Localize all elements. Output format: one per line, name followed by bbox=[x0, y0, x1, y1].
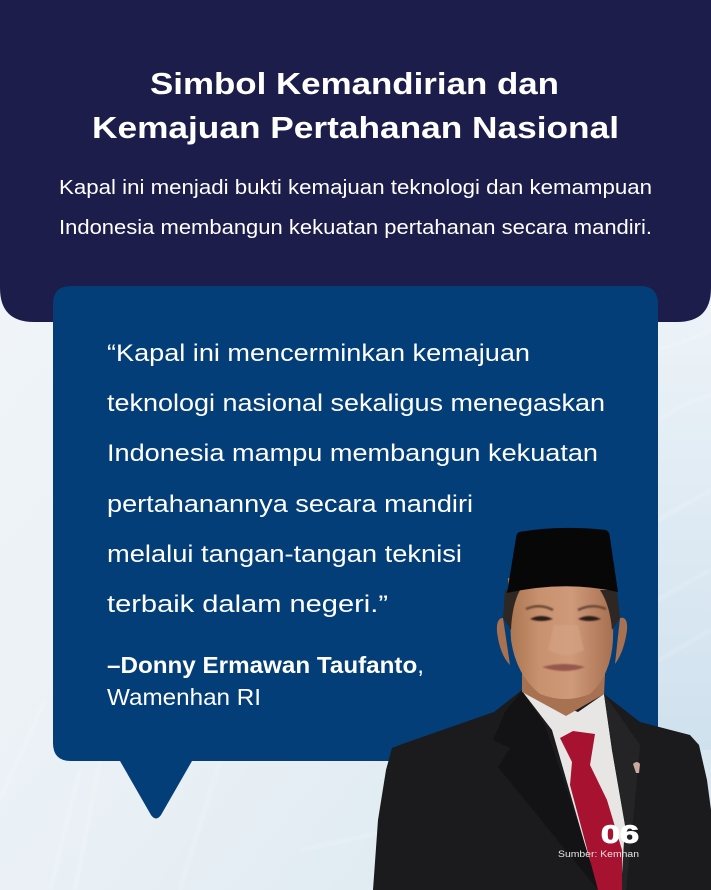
right lapel bbox=[604, 694, 640, 890]
subtitle: Kapal ini menjadi bukti kemajuan teknologi dan kemampuan bbox=[59, 176, 652, 199]
header panel bbox=[0, 0, 711, 322]
subtitle bbox=[59, 176, 652, 239]
title bbox=[92, 66, 619, 145]
facial features bbox=[526, 606, 606, 671]
quote text: melalui tangan-tangan teknisi bbox=[107, 541, 462, 568]
page number: 06 bbox=[601, 821, 639, 849]
quote text bbox=[107, 340, 605, 618]
quote text: “Kapal ini mencerminkan kemajuan bbox=[107, 340, 530, 367]
quote text: terbaik dalam negeri.” bbox=[107, 591, 388, 618]
title: Simbol Kemandirian dan bbox=[150, 66, 559, 101]
quote attribution: –Donny Ermawan Taufanto , bbox=[107, 652, 424, 678]
title: Kemajuan Pertahanan Nasional bbox=[92, 110, 619, 145]
left lapel bbox=[493, 691, 600, 890]
ears bbox=[497, 618, 627, 665]
quote attribution: Wamenhan RI bbox=[107, 684, 261, 710]
source credit: Sumber: Kemhan bbox=[558, 849, 639, 860]
speech bubble panel bbox=[53, 286, 658, 818]
subtitle: Indonesia membangun kekuatan pertahanan secara mandiri. bbox=[59, 216, 652, 239]
quote attribution bbox=[107, 652, 424, 710]
lapel pin bbox=[633, 762, 640, 773]
suit jacket bbox=[373, 690, 711, 890]
hair bbox=[503, 590, 620, 630]
portrait of official bbox=[373, 528, 711, 890]
face bbox=[508, 578, 614, 699]
quote text: teknologi nasional sekaligus menegaskan bbox=[107, 390, 605, 417]
shirt bbox=[522, 691, 625, 890]
neck bbox=[522, 655, 606, 716]
quote text: Indonesia mampu membangun kekuatan bbox=[107, 440, 598, 467]
black peci cap bbox=[507, 528, 618, 593]
quote text: pertahanannya secara mandiri bbox=[107, 491, 473, 518]
necktie bbox=[560, 731, 622, 890]
